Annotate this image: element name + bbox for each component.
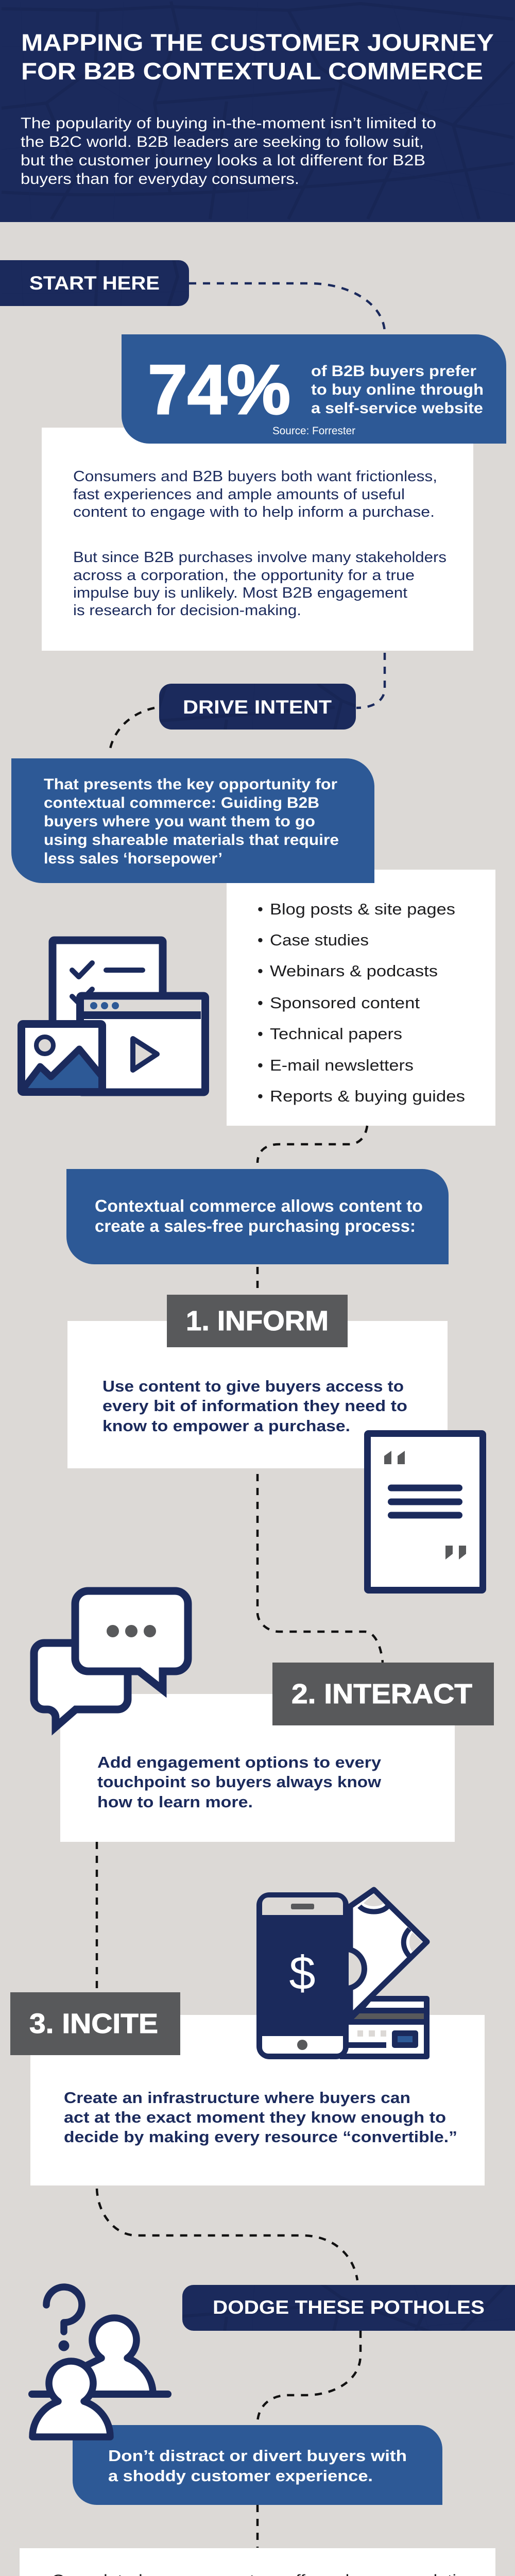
route line: incite to potholes (97, 2189, 357, 2280)
panel: content list: • (258, 1025, 263, 1043)
panel: content list: Technical papers (270, 1025, 402, 1043)
intro paragraph: The popularity of buying in-the-moment isn’t limited to (21, 115, 436, 132)
title: FOR B2B CONTEXTUAL COMMERCE (21, 58, 483, 84)
intro paragraph: the B2C world. B2B leaders are seeking to follow suit, (21, 133, 424, 150)
panel: process callout (66, 1169, 449, 1264)
intro paragraph: buyers than for everyday consumers. (21, 171, 299, 188)
step text: how to learn more. (97, 1793, 253, 1811)
route line: list to process callout (258, 1126, 367, 1163)
panel: opportunity callout: contextual commerce: Guiding B2B (44, 794, 319, 811)
panel: content list: • (258, 1087, 263, 1105)
step label (272, 1663, 494, 1725)
panel: consumers and B2B text: But since B2B purchases involve many stakeholders (73, 549, 447, 566)
panel: content list: Case studies (270, 931, 369, 949)
panel: opportunity callout: using shareable materials that require (44, 832, 339, 849)
route line: callout to pothole list (256, 2505, 259, 2548)
big number: 74% (148, 350, 290, 429)
route line: drive intent to opportunity (109, 708, 154, 754)
route line: inform to interact (258, 1474, 383, 1663)
panel: consumers and B2B text (42, 428, 473, 651)
panel: consumers and B2B text: across a corporation, the opportunity for a true (73, 567, 415, 584)
step label: 1. INFORM (186, 1306, 329, 1336)
title (21, 29, 494, 84)
panel: do not distract callout (73, 2425, 442, 2505)
step text (97, 1753, 382, 1811)
card (340, 1996, 430, 2059)
source: Source: Forrester (272, 425, 355, 437)
panel: content list (227, 870, 495, 1126)
icon: confused people (32, 2287, 168, 2437)
panel: consumers and B2B text: fast experiences and ample amounts of useful (73, 486, 405, 503)
panel: consumers and B2B text: is research for decision-making. (73, 602, 301, 619)
heading: dodge these potholes (182, 2285, 515, 2331)
route line: callout to inform (256, 1267, 259, 1295)
step text: act at the exact moment they know enough to (64, 2108, 446, 2126)
step label: 3. INCITE (29, 2008, 158, 2039)
stat description: a self-service website (311, 400, 483, 417)
intro paragraph (21, 115, 436, 188)
step text: Use content to give buyers access to (102, 1377, 404, 1395)
step text: know to empower a purchase. (102, 1417, 350, 1435)
panel: step 1 inform (67, 1295, 448, 1468)
step text: decide by making every resource “convertible.” (64, 2128, 457, 2146)
panel: content list: • (258, 931, 263, 949)
route line: text to drive intent (356, 653, 385, 708)
heading: start here (0, 260, 189, 306)
icon: chat bubbles (34, 1591, 188, 1727)
route line: interact to incite (96, 1842, 98, 1992)
panel: content list: • (258, 994, 263, 1012)
heading: dodge these potholes: DODGE THESE POTHOLES (213, 2297, 485, 2318)
panel: content list: E-mail newsletters (270, 1056, 414, 1074)
step text: Create an infrastructure where buyers can (64, 2089, 410, 2107)
icon: content media (21, 940, 205, 1095)
icon: phone, cash and card (256, 1890, 430, 2059)
cash (345, 1890, 427, 2017)
panel: header (0, 0, 515, 222)
heading: drive intent: DRIVE INTENT (183, 697, 332, 718)
panel: content list: • (258, 900, 263, 918)
panel: consumers and B2B text: Consumers and B2B buyers both want frictionless, (73, 468, 437, 485)
step text (102, 1377, 407, 1435)
phone (256, 1892, 349, 2059)
heading: drive intent (159, 684, 356, 730)
step label (10, 1992, 180, 2055)
panel: do not distract callout: Don’t distract or divert buyers with (108, 2447, 407, 2465)
title: MAPPING THE CUSTOMER JOURNEY (21, 29, 494, 56)
panel: process callout: Contextual commerce allows content to (95, 1196, 423, 1215)
panel: opportunity callout: buyers where you want them to go (44, 813, 315, 830)
step label: 2. INTERACT (291, 1679, 472, 1709)
step text: every bit of information they need to (102, 1397, 407, 1415)
panel: content list: Blog posts & site pages (270, 900, 455, 918)
panel: 74 percent stat (122, 334, 506, 444)
panel: step 3 incite (10, 1992, 485, 2185)
panel: consumers and B2B text: impulse buy is unlikely. Most B2B engagement (73, 585, 407, 601)
panel: step 2 interact (60, 1663, 494, 1842)
route line: start to stat (189, 283, 385, 332)
panel: process callout: create a sales-free purchasing process: (95, 1216, 416, 1235)
panel: opportunity callout: less sales ‘horsepower’ (44, 850, 222, 867)
step text (64, 2089, 457, 2146)
panel: pothole list (20, 2548, 495, 2576)
panel: content list: Reports & buying guides (270, 1087, 465, 1105)
stat description (311, 363, 484, 417)
intro paragraph: but the customer journey looks a lot different for B2B (21, 152, 425, 169)
stat description: of B2B buyers prefer (311, 363, 476, 380)
step text: Add engagement options to every (97, 1753, 382, 1771)
icon: quote document (368, 1433, 483, 1590)
panel: content list: Webinars & podcasts (270, 962, 438, 980)
step text: touchpoint so buyers always know (97, 1773, 382, 1791)
panel: consumers and B2B text: content to engage with to help inform a purchase. (73, 504, 435, 520)
panel: content list: • (258, 1056, 263, 1074)
heading: start here: START HERE (29, 273, 160, 294)
panel: content list: • (258, 962, 263, 980)
panel: content list: Sponsored content (270, 994, 420, 1012)
phone: $ (289, 1947, 316, 1999)
stat description: to buy online through (311, 381, 484, 398)
panel: do not distract callout: a shoddy customer experience. (108, 2467, 373, 2485)
panel: opportunity callout (11, 758, 374, 883)
panel: opportunity callout: That presents the key opportunity for (44, 776, 337, 793)
step label (167, 1295, 348, 1347)
route line: potholes to callout (258, 2331, 360, 2424)
